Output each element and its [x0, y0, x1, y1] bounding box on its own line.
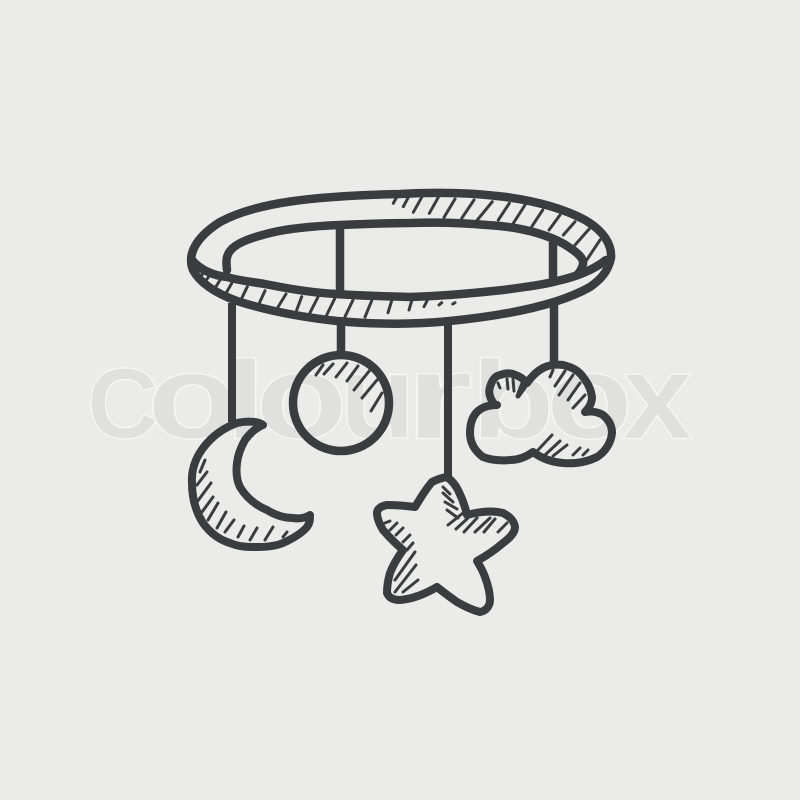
cloud hatching: [498, 370, 588, 456]
watermark: Colourbox: o: [147, 330, 238, 464]
ring inner back edge: [226, 223, 583, 275]
icon: cloud: [470, 365, 612, 463]
ring bottom hatching: [202, 272, 455, 317]
icon: star: [377, 477, 515, 612]
watermark: Colourbox: l: [224, 338, 266, 462]
star hatching: [385, 487, 507, 592]
star outline: [377, 477, 515, 612]
icon: moon: [192, 422, 310, 547]
watermark: Colourbox: r: [405, 328, 473, 464]
watermark: Colourbox: u: [339, 330, 416, 464]
ball hatching: [316, 363, 382, 411]
moon outline: [192, 422, 310, 547]
cloud lobe notch: [518, 383, 527, 396]
moon hatching: [197, 460, 287, 540]
watermark: Colourbox: C: [87, 348, 159, 460]
watermark: Colourbox: o: [546, 330, 633, 464]
watermark: Colourbox: b: [471, 338, 555, 462]
ball outline: [293, 355, 389, 451]
ring front inner edge: [192, 260, 606, 297]
ring top hatching: [393, 197, 600, 260]
ring: [191, 193, 611, 324]
watermark: Colourbox: x: [622, 328, 693, 464]
cloud outline: [470, 365, 612, 463]
hanging strings: [232, 228, 554, 480]
watermark: Colourbox: [87, 328, 693, 464]
icon: ball: [293, 355, 389, 451]
ring outer edge: [191, 193, 611, 324]
watermark: Colourbox: o: [255, 330, 348, 464]
